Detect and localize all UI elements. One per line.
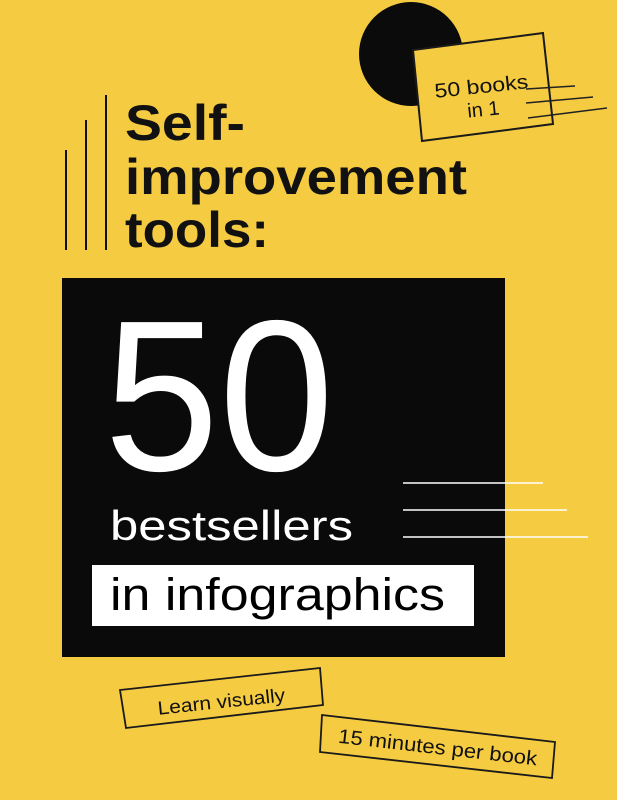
label: 15 minutes per book: 15 minutes per book — [337, 726, 539, 770]
big number 50: 50 — [104, 275, 334, 516]
label: 15 minutes per book — [320, 715, 555, 778]
panel: black box — [62, 275, 505, 657]
white label: in infographics: in infographics — [110, 569, 445, 620]
text: bestsellers: bestsellers — [110, 502, 353, 549]
title: improvement — [125, 149, 467, 205]
icon: black circle — [359, 2, 463, 106]
callout: 50 books in 1: in 1 — [466, 97, 501, 123]
callout: 50 books in 1 — [413, 33, 607, 141]
white label: in infographics — [92, 565, 474, 626]
decorative vertical lines — [66, 95, 106, 250]
title — [125, 95, 467, 258]
title: tools: — [125, 202, 269, 258]
label: Learn visually — [120, 668, 323, 728]
decorative white lines — [403, 483, 588, 537]
callout: 50 books in 1: 50 books — [433, 71, 529, 103]
label: Learn visually: Learn visually — [157, 685, 287, 720]
title: Self- — [125, 95, 245, 151]
